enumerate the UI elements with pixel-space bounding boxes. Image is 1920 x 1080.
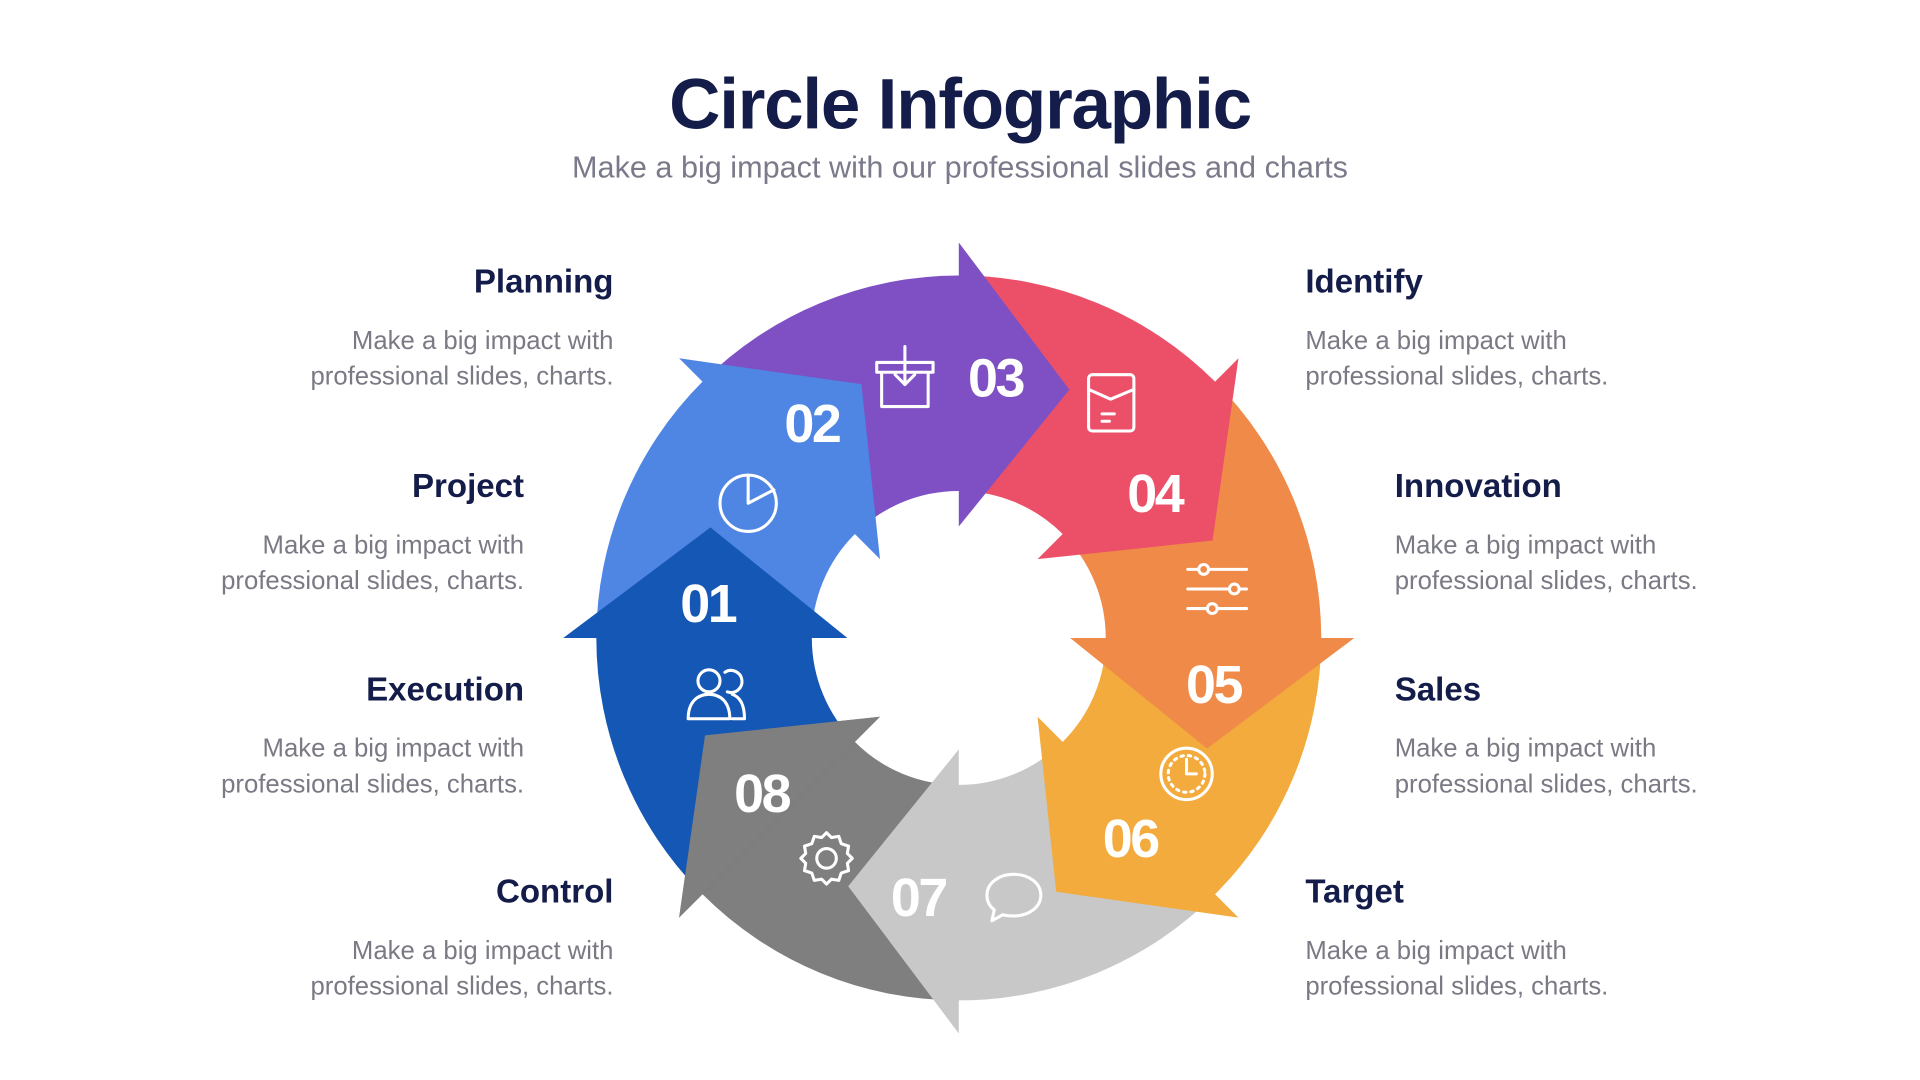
- text: Control: Control: [496, 873, 613, 910]
- text: Control: professional slides, charts.: [310, 972, 613, 1000]
- segment 08 head: [601, 639, 880, 918]
- text: Identify: Make a big impact with: [1305, 327, 1567, 355]
- numbers: 08: [734, 764, 791, 824]
- text: Project: [221, 468, 524, 595]
- text: Project: Make a big impact with: [263, 531, 524, 560]
- text: Innovation: Innovation: [1395, 468, 1562, 504]
- icon: chat: [987, 874, 1041, 921]
- icon: people: [688, 670, 744, 719]
- text: Planning: [310, 263, 613, 391]
- numbers: 03: [968, 349, 1025, 409]
- text: Planning: Planning: [474, 263, 613, 300]
- segment 07: [848, 742, 1215, 1033]
- numbers: 04: [1127, 464, 1185, 524]
- text: Innovation: professional slides, charts.: [1395, 567, 1698, 595]
- text: Sales: Make a big impact with: [1395, 735, 1656, 763]
- text: Execution: Execution: [366, 671, 524, 708]
- text: Control: Make a big impact with: [352, 937, 613, 965]
- text: Project: Project: [412, 468, 524, 504]
- numbers: 06: [1103, 809, 1159, 869]
- segment 06: [954, 530, 1420, 996]
- text: Innovation: Make a big impact with: [1395, 531, 1656, 560]
- icon: inbox: [877, 347, 933, 407]
- icon: gear: [801, 833, 852, 884]
- text: Sales: Sales: [1395, 671, 1481, 708]
- text: Identify: [1305, 263, 1608, 391]
- numbers: [680, 349, 1242, 928]
- text: Execution: [221, 671, 524, 798]
- text: Target: Make a big impact with: [1305, 937, 1567, 965]
- numbers: 07: [891, 868, 946, 928]
- text: Sales: professional slides, charts.: [1395, 770, 1698, 798]
- numbers: 01: [680, 574, 737, 634]
- subtitle: Make a big impact with our professional slides and charts: [572, 151, 1348, 185]
- text: Project: professional slides, charts.: [221, 567, 524, 595]
- segment 01: [563, 527, 855, 894]
- text: Execution: Make a big impact with: [263, 735, 524, 763]
- text: Planning: professional slides, charts.: [310, 362, 613, 391]
- icon: pie: [720, 475, 776, 531]
- text: Planning: Make a big impact with: [352, 327, 613, 355]
- text: Execution: professional slides, charts.: [221, 770, 524, 798]
- icon: sliders: [1188, 564, 1247, 613]
- text: Target: professional slides, charts.: [1305, 972, 1608, 1000]
- text: Sales: [1395, 671, 1698, 798]
- icon: box: [1089, 375, 1134, 431]
- segment 04: [851, 177, 1317, 643]
- text: Identify: professional slides, charts.: [1305, 362, 1608, 391]
- numbers: 05: [1186, 655, 1242, 715]
- icons: [688, 347, 1247, 921]
- segment 02: [498, 280, 963, 746]
- segment 05: [1063, 382, 1354, 749]
- text: Target: [1305, 873, 1608, 1000]
- icon: clock: [1161, 748, 1212, 800]
- text: Target: Target: [1305, 873, 1404, 910]
- numbers: 02: [784, 394, 840, 454]
- segment 08: [601, 633, 1066, 1080]
- text: Innovation: [1395, 468, 1698, 595]
- title: Circle Infographic: [669, 65, 1251, 144]
- text: Identify: Identify: [1305, 263, 1423, 300]
- segment 03: [702, 242, 1069, 534]
- text: Control: [310, 873, 613, 1000]
